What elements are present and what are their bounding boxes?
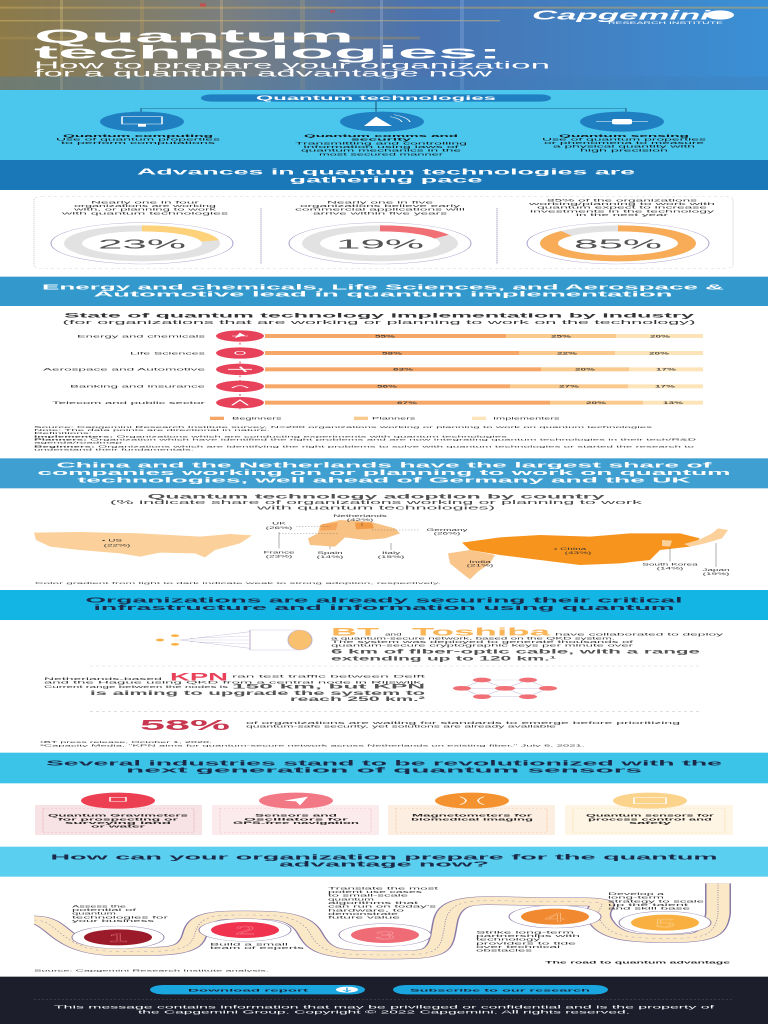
icon: quantum computing [100,112,184,132]
text block: BT and Toshiba: quantum-secure cryptographic keys per minute over [331,644,634,648]
row: life sciences: 20% [649,351,670,355]
map title [110,493,642,511]
disclaimer [54,1005,714,1015]
text: quantum computing: to perform computations [61,141,216,145]
text: quantum sensing [542,134,707,152]
step texts: potential of [72,908,138,912]
row: energy: Energy and chemicals [77,334,206,338]
map: US [34,532,252,557]
heading band: industries [0,277,768,306]
step texts: Develop a [608,892,665,896]
step texts: strategy to scale [608,899,704,903]
stat: 85% [527,198,715,264]
card: process control [565,793,733,835]
map title: with quantum technologies) [255,505,495,511]
pill heading [201,94,551,102]
step texts: providers to tide [476,941,576,945]
text: comms and security: quantum mechanics in the [301,149,461,153]
stat: 19%: arrive within five years [313,211,448,215]
map title: Quantum technology adoption by country [148,493,606,500]
source notes: Source: Capgemini Research Institute survey, N=200 organizations working or planning to work on quantum technologies [34,426,653,429]
card: gravimeters: Quantum Gravimeters [48,814,188,818]
map: adoption by country: Spain [317,551,343,555]
row: energy: 25% [551,334,572,338]
step 5 [619,911,711,934]
stat: 85%: 85% of the organizations [547,198,698,202]
source notes: Definitions: [34,432,92,435]
map: adoption by country: • US [102,539,122,543]
stat: 19% [289,200,471,264]
text block: KPN [44,671,427,702]
heading band: industries: Energy and chemicals, Life Sciences, and Aerospace & [42,283,724,291]
step 1 [72,926,164,949]
title: Quantum [34,26,354,47]
map: adoption by country: (43%) [565,551,592,555]
card: magnetometers: Magnetometers for [412,814,532,818]
card: gravimeters: for prospecting or [58,817,178,821]
icon: quantum network [453,678,557,699]
step texts: quantum [328,897,374,901]
card: navigation [212,793,379,835]
title: technologies: [34,42,502,63]
card: process control: safety [629,821,673,825]
map: adoption by country: South Korea [642,563,699,567]
chart title: (for organizations that are working or planning to work on the technology) [62,319,695,325]
caption: road: The road to quantum advantage [545,961,730,965]
stat: 23%: with, or planning to work [72,208,216,212]
map: adoption by country: (21%) [467,564,494,568]
row: telecom: 20% [586,401,607,405]
heading band: securing infrastructure: infrastructure and information using quantum [93,604,674,612]
text block: BT and Toshiba: have collaborated to deploy [555,632,724,636]
text block: KPN: Netherlands-based [44,677,162,681]
map: adoption by country: UK [272,522,286,526]
text: quantum sensing: high precision [580,148,668,152]
text: comms and security: Transmitting and controlling [295,141,467,145]
step texts: future value [328,916,400,920]
map: adoption by country: Japan [702,568,730,572]
step texts: obstacles [476,949,532,953]
bar chart: implementation by industry [43,330,703,409]
icon: sensing [580,112,664,132]
stat: 58%: quantum-safe security, yet solutions are already available [246,725,556,729]
heading band: quantum sensors [0,753,768,783]
map title: (% indicate share of organizations working or planning to work [110,499,642,505]
card: navigation: Sensors and [255,814,338,818]
stat: 58%: of organizations are waiting for standards to emerge before prioritizing [246,721,680,725]
row: banking: 27% [559,385,580,389]
heading band: quantum sensors: next generation of quantum sensors [126,766,642,774]
card: gravimeters: surveying land [65,821,172,825]
logo: Capgemini Research Institute: Capgemini [532,8,711,22]
heading band: prepare: How can your organization prepare for the quantum [51,853,717,861]
map: India [448,550,495,579]
source notes: Planners: Organization which have identified the right problems and are now integrating quantum technologies in their tech/R&D [34,438,696,442]
heading band: prepare [0,847,768,877]
heading band: securing infrastructure [0,590,768,620]
step texts: technologies for [72,915,169,919]
source notes: Beginners: Organizations which are identifying the right problems to solve with quantum technologies or started the research to [34,445,694,448]
step texts: quantum [72,912,116,916]
map: adoption by country: (23%) [266,554,293,558]
disclaimer: the Capgemini Group. Copyright © 2022 Capgemini. All rights reserved. [138,1010,630,1015]
step texts: partnerships with [476,934,580,938]
panel: quantum technologies [0,90,768,160]
step 4 [509,905,601,928]
map caption: Color gradient from light to dark indicate weak to strong adoption, respectively. [35,582,441,585]
step texts: Build a small [210,942,289,946]
text: comms and security: security [351,138,412,142]
card: magnetometers: biomedical imaging [411,817,534,821]
step 4: 4 [545,911,565,924]
text: quantum sensing: Quantum sensing [559,134,689,138]
map: Japan and Korea [684,528,728,547]
row: telecom: 67% [397,401,418,405]
text block: KPN: 150 km, but KPN [232,683,425,690]
text: quantum computing [56,134,221,145]
row: energy [77,330,703,342]
step texts: long-term [608,896,664,900]
stat: 85%: working/planning to work with [527,202,715,206]
map: adoption by country: Italy [382,551,401,555]
row: telecom [52,397,703,408]
step texts: Strike long-term [476,930,574,934]
text: quantum sensing: a physical quantity with [553,145,695,149]
footnotes: ¹BT press release, October 1, 2020. [40,741,212,744]
source notes: Note: The data points are directional in nature. [34,429,270,432]
stat: 85%: 85% [574,237,662,251]
card: navigation: Oscillators for [244,817,348,821]
row: aerospace: 63% [393,368,414,372]
map: Europe [308,520,400,547]
stat: 58% [140,717,680,733]
heading band: advances [0,160,768,190]
step texts: technology [476,938,540,942]
map: adoption by country: India [469,560,492,564]
text block: KPN: is aiming to upgrade the system to [90,690,425,696]
footnotes: ²Capacity Media, "KPN aims for quantum-secure network across Netherlands on existing fiber," July 6, 2021. [40,744,585,748]
stat: 58%: 58% [140,717,230,733]
road diagram [34,883,718,955]
heading band: countries: technologies, well ahead of Germany and the UK [77,476,691,484]
step texts: demonstrate [328,912,398,916]
legend: Implementers [493,417,560,421]
step texts: Assess the [72,904,126,908]
row: telecom: 13% [663,401,684,405]
row: life sciences: Life Sciences [130,351,206,355]
heading band: countries [0,458,768,488]
text block: BT and Toshiba: extending up to 120 km.¹ [331,655,557,662]
stat: 23% [51,200,233,264]
step 2: 2 [235,924,255,937]
text block: KPN: and the Hague using QKD from a central node in Rijswijk. [44,680,425,684]
step texts: up the talent [608,903,690,907]
text block: BT and Toshiba [331,625,724,662]
step texts: hardware, to [328,908,404,912]
text: quantum sensing: Use of quantum properties [542,137,707,141]
text: comms and security [295,134,467,156]
legend [210,417,560,421]
text block: BT and Toshiba: BT [331,625,380,638]
heading band: advances: gathering pace [290,175,483,184]
text block: BT and Toshiba: 6 km of fiber-optic cable, with a range [331,648,700,655]
row: life sciences [130,347,703,359]
text block: BT and Toshiba: The system was deployed to generate thousands of [331,640,635,644]
stat: 85%: investments in the technology [530,209,715,213]
map: adoption by country: France [263,550,295,554]
step 3 [339,924,431,946]
stat: 85%: quantum expect to increase [537,206,707,210]
source notes [34,426,696,451]
panel: statistics donuts [34,197,733,268]
button: download [150,985,365,994]
step texts: potent use cases [328,890,422,894]
source notes: Implementers: Organizations which are conducting experiments with quantum technologies [34,435,508,438]
map: adoption by country: (26%) [434,532,461,536]
step texts: team of experts [210,946,305,950]
stat: 23%: Nearly one in four [91,200,200,204]
card: gravimeters: or water [91,825,145,829]
text: comms and security: information using laws of [303,145,460,149]
map: adoption by country [34,514,730,579]
footnotes [40,741,585,748]
map: adoption by country: (15%) [378,555,405,559]
text: quantum computing: Use of quantum properties [56,137,221,141]
heading band: industries: Automotive lead in quantum implementation [94,290,673,298]
title: How to prepare your organization [34,60,550,71]
text block: KPN: reach 250 km.² [290,696,426,702]
map: adoption by country: (26%) [266,526,293,530]
text block: BT and Toshiba: and [385,632,402,636]
disclaimer: This message contains information that may be privileged or confidential and is the property of [54,1005,714,1010]
button: subscribe [393,985,608,994]
step 3: 3 [375,929,395,942]
text: comms and security: most secured manner [319,152,444,156]
text block: KPN: ran test traffic between Delft [232,675,427,679]
step texts: algorithms that [328,901,420,905]
heading band: quantum sensors: Several industries stand to be revolutionized with the [46,759,722,767]
title [34,26,550,79]
footer [0,977,768,1024]
logo: Capgemini Research Institute: RESEARCH INSTITUTE [608,21,724,25]
row: aerospace: Aerospace and Automotive [43,367,205,372]
map: China [462,533,700,565]
text: quantum sensing: or phenomena to measure [544,141,704,145]
card: navigation: GPS-free navigation [233,821,360,825]
row: banking: 17% [655,385,676,389]
step 1: 1 [108,931,128,945]
step texts: and skill base [608,907,690,911]
card: process control: process control and [588,817,713,821]
stat: 19%: commercial applications will [295,208,466,212]
stat: 23%: organizations are working [74,204,216,208]
source: Source: Capgemini Research Institute analysis. [34,969,269,972]
pill heading: Quantum technologies [256,95,496,101]
step texts: your business [72,919,154,923]
heading band: prepare: advantage now? [279,860,489,868]
step 5: 5 [655,917,675,930]
legend: Planners [372,417,415,421]
card: gravimeters [35,793,202,835]
card: process control: Quantum sensors for [586,814,714,818]
step 2 [199,919,291,941]
heading band: countries: China and the Netherlands have the largest share of [56,461,712,469]
stat: 19%: 19% [336,237,424,251]
step texts [72,886,704,953]
icon: fiber optic cable [156,630,312,650]
stat: 19%: Nearly one in five [327,200,433,204]
row: banking: Banking and insurance [70,384,205,389]
heading band: securing infrastructure: Organizations are already securing their critical [85,596,682,604]
row: aerospace: 20% [575,368,596,372]
stat: 23%: with quantum technologies [60,211,229,215]
text block: BT and Toshiba: Toshiba [412,625,551,638]
source notes: understand their fundamentals. [34,448,194,451]
legend: Beginners [232,417,281,421]
icon: comms [340,112,424,132]
chart title: State of quantum technology implementation by industry [64,312,694,319]
map: adoption by country: Germany [426,528,468,532]
row: banking [70,381,703,392]
map: adoption by country: (42%) [347,518,374,522]
row: energy: 55% [375,334,396,338]
stat: 19%: organizations believe early [300,204,461,208]
row: telecom: Telecom and public sector [52,400,205,405]
row: energy: 20% [650,334,671,338]
row: life sciences: 58% [382,351,403,355]
map: adoption by country: Netherlands [333,514,387,518]
title: for a quantum advantage now [34,67,493,79]
text: comms and security: Quantum comms and [304,134,458,138]
heading band: advances: Advances in quantum technologies are [137,168,635,176]
row: life sciences: 22% [557,351,578,355]
step texts: can run on today's [328,905,436,909]
text block: KPN: Current range between the nodes is [44,685,228,689]
text block: KPN: KPN [170,671,228,683]
step texts: Translate the most [328,886,440,890]
button: subscribe: Subscribe to our research [410,988,590,992]
text: quantum computing: Quantum computing [63,134,213,138]
map: adoption by country: (14%) [657,567,684,571]
source notes: agenda/roadmap [34,441,122,445]
button: download: Download report [188,988,308,992]
map: adoption by country: • China [554,547,587,551]
row: aerospace: 17% [656,368,677,372]
card: magnetometers [388,793,555,835]
map: adoption by country: (14%) [317,555,344,559]
row: banking: 56% [377,385,398,389]
row: aerospace [43,364,703,375]
text block: BT and Toshiba: a quantum-secure network, based on the QKD system. [331,636,615,640]
step texts: over technical [476,945,561,949]
map: adoption by country: (19%) [703,572,730,576]
header banner [0,0,768,90]
step texts: to small-scale [328,894,408,898]
chart title [62,312,695,325]
stat: 85%: in the next year [576,213,669,217]
map: adoption by country: (22%) [104,544,131,548]
heading band: countries: companies working on or planning to work on quantum [37,469,730,477]
stat: 23%: 23% [98,237,186,251]
